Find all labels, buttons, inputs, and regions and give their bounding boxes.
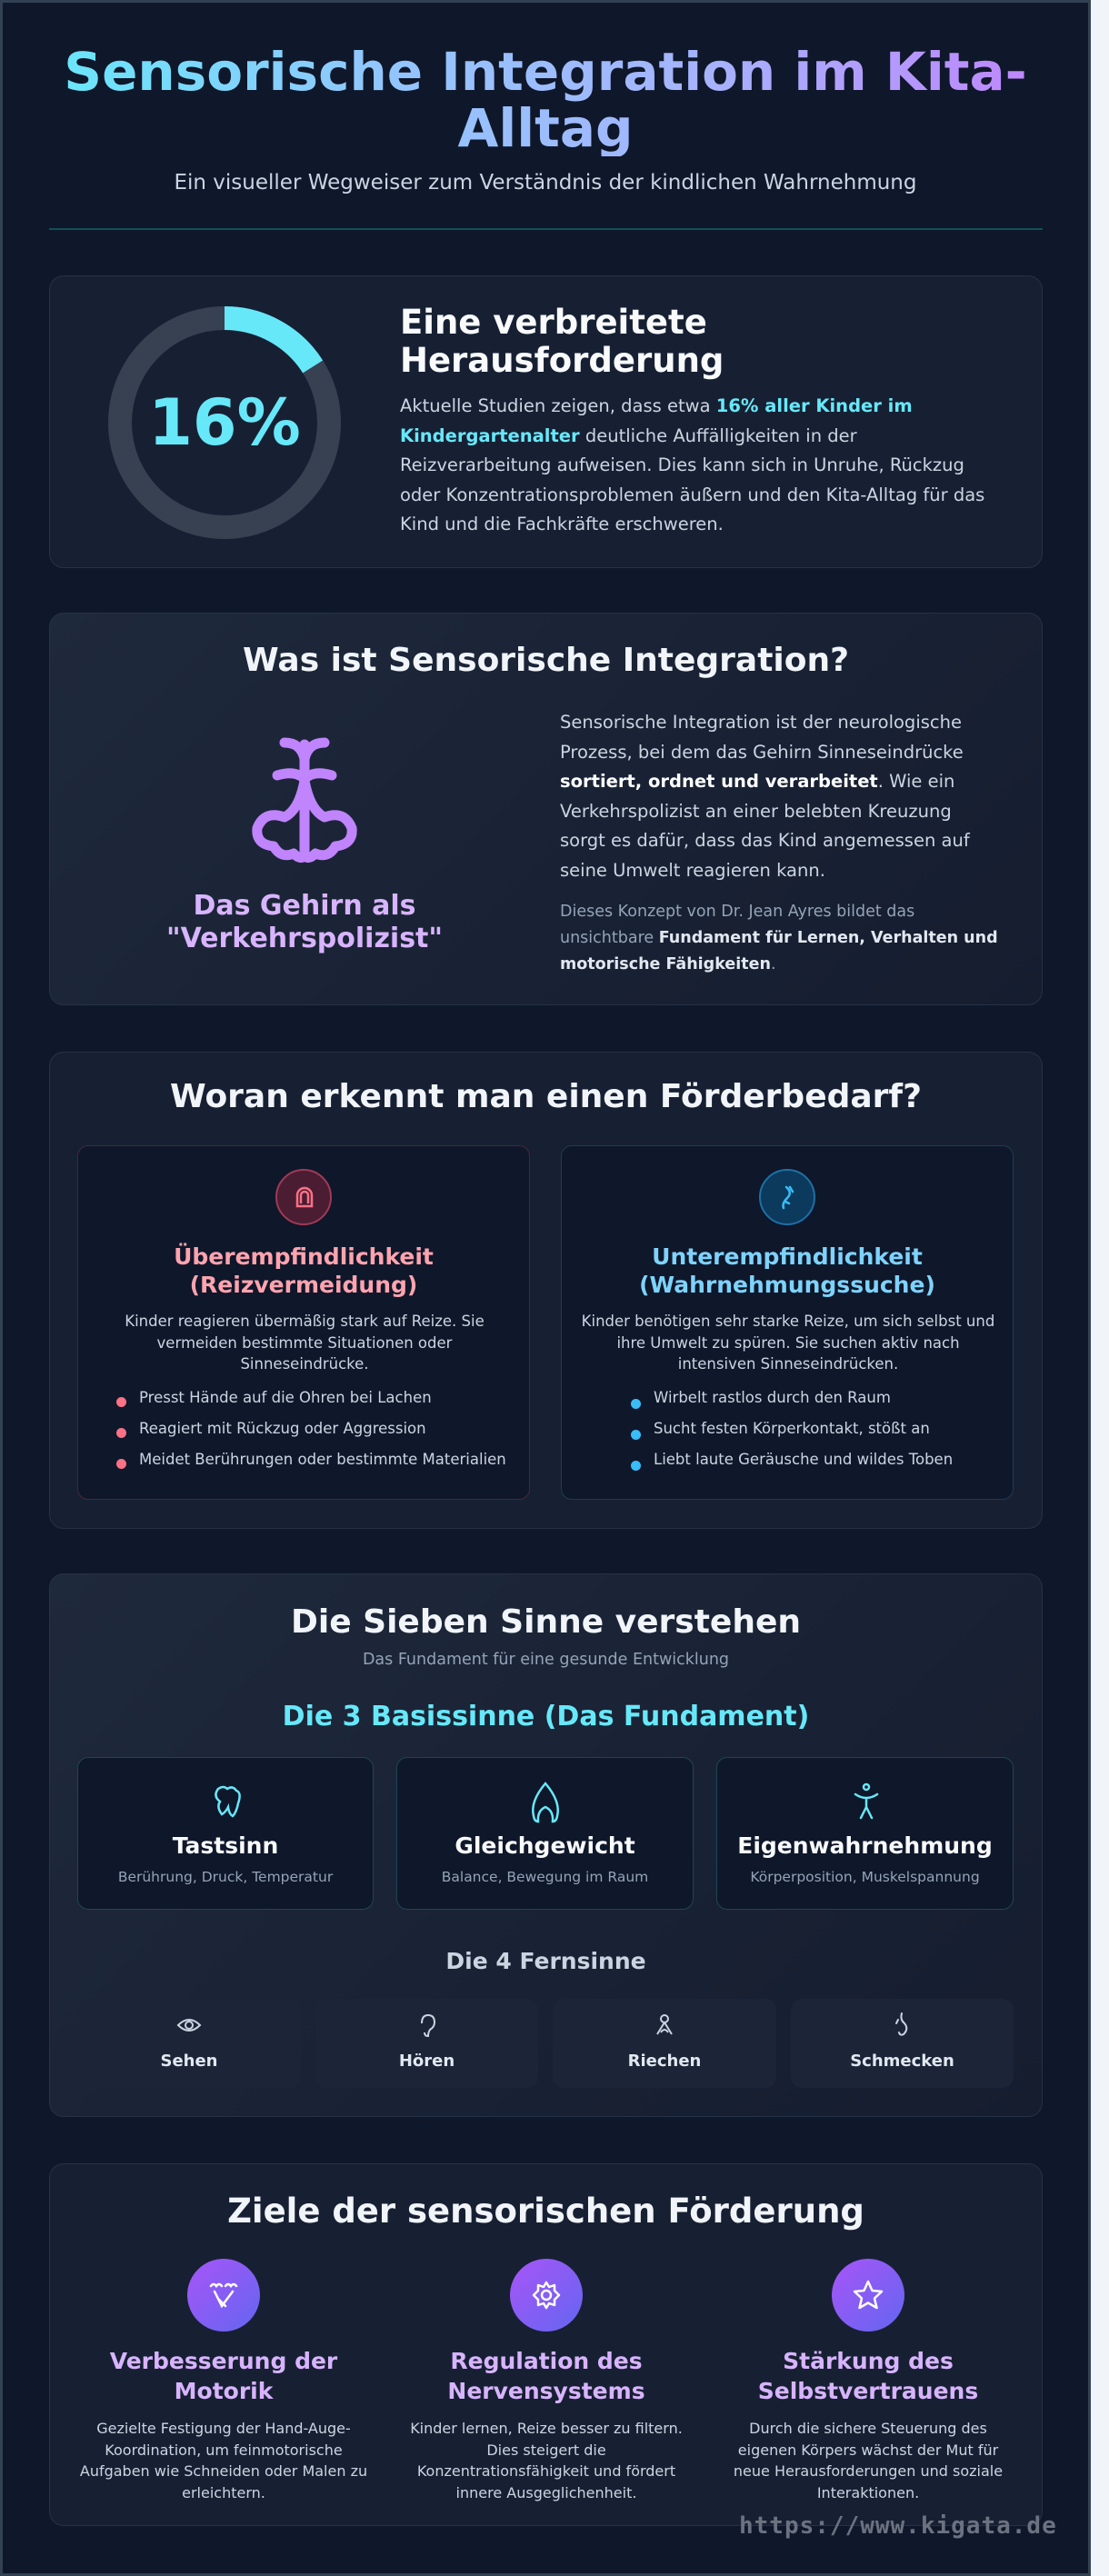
subheading: Das Fundament für eine gesunde Entwicklung [363,1651,729,1669]
goal: nervous system: Kinder lernen, Reize besser zu filtern. [410,2420,683,2437]
card: Sehen: Sehen [160,2052,218,2071]
bullet list: Reagiert mit Rückzug oder Aggression [139,1420,426,1437]
card title: (Wahrnehmungssuche) [639,1272,935,1298]
icon: eye [176,2019,202,2032]
donut chart 16%: 16% [148,385,301,460]
card: Riechen [553,1999,776,2088]
bullet list: Wirbelt rastlos durch den Raum [654,1389,891,1406]
caption: Das Gehirn als [193,890,416,922]
heading [400,303,724,380]
text block: Reizverarbeitung aufweisen. Dies kann sich in Unruhe, Rückzug oder Konzentrationsproblemen äußern und den Kita-Alltag für das Kind und die Fachkräfte erschweren. [400,454,984,534]
card text: Kinder benötigen sehr starke Reize, um sich selbst und ihre Umwelt zu spüren. Sie suchen aktiv nach intensiven Sinneseindrücken. [582,1313,994,1373]
goal: motor skills: Gezielte Festigung der Hand-Auge-Koordination, um feinmotorische Aufgaben wie Schneiden oder Malen zu erleichtern. [80,2420,367,2501]
goal: motor skills: Motorik [175,2378,273,2404]
goal: nervous system: Dies steigert die [486,2441,606,2458]
card title: Unterempfindlichkeit [652,1243,923,1270]
goal: motor skills: Verbesserung der [110,2348,337,2374]
goal: self confidence: Stärkung des [783,2348,954,2374]
title: Sensorische Integration im Kita- [64,41,1027,103]
text block [400,395,984,534]
card: over-sensitivity [77,1145,530,1500]
panel: seven senses [49,1573,1043,2117]
panel: signs [49,1052,1043,1529]
bullet list [116,1389,506,1469]
heading: Herausforderung [400,341,724,380]
card: Gleichgewicht: Balance, Bewegung im Raum [442,1869,648,1885]
goal: self confidence: Selbstvertrauens [758,2378,978,2404]
icon: hand [215,1785,241,1818]
heading: Eine verbreitete [400,303,707,342]
icon: flame [532,1782,559,1823]
card text: Kinder reagieren übermäßig stark auf Reize. Sie vermeiden bestimmte Situationen oder Sinneseindrücke. [125,1313,485,1373]
heading: Woran erkennt man einen Förderbedarf? [170,1078,922,1115]
section title: basic senses: Die 3 Basissinne (Das Fundament) [283,1701,809,1732]
card: Tastsinn: Berührung, Druck, Temperatur [118,1869,333,1885]
card title [174,1243,434,1298]
icon: star [832,2259,904,2331]
card: Sehen [77,1999,301,2088]
goal: motor skills [80,2259,367,2501]
text block: Aktuelle Studien zeigen, dass etwa 16% aller Kinder im Kindergartenalter deutliche Auffälligkeiten in der [400,395,913,445]
title: Alltag [457,97,634,159]
bullet list: Liebt laute Geräusche und wildes Toben [654,1451,953,1468]
card: Hören [315,1999,538,2088]
bullet list: Sucht festen Körperkontakt, stößt an [654,1420,930,1437]
icon: hands [187,2259,260,2331]
card: under-sensitivity [561,1145,1014,1500]
goal: self confidence [734,2259,1003,2501]
donut chart 16% [108,306,341,539]
card: Tastsinn: Tastsinn [173,1832,278,1859]
card title: (Reizvermeidung) [190,1272,417,1298]
icon: person [854,1783,878,1820]
heading: Was ist Sensorische Integration? [243,642,849,679]
goal: nervous system: Konzentrationsfähigkeit und fördert [417,2462,675,2480]
card: Schmecken [791,1999,1014,2088]
watermark: https://www.kigata.de [739,2512,1057,2540]
subtitle: Ein visueller Wegweiser zum Verständnis der kindlichen Wahrnehmung [175,171,916,195]
bullet list: Meidet Berührungen oder bestimmte Materialien [139,1451,506,1468]
card title [639,1243,935,1298]
goal: nervous system: Regulation des [450,2348,643,2374]
goal: nervous system: innere Ausgeglichenheit. [456,2483,636,2501]
heading: Die Sieben Sinne verstehen [291,1603,801,1641]
icon: tongue [895,2012,907,2036]
section title: distance senses: Die 4 Fernsinne [445,1948,646,1974]
icon: ear protection [275,1169,332,1225]
panel: statistic [49,275,1043,568]
bullet list [631,1389,953,1471]
goal: nervous system: Nervensystems [447,2378,645,2404]
icon: nose [656,2014,673,2034]
card: Schmecken: Schmecken [850,2052,954,2071]
card: Riechen: Riechen [628,2052,701,2071]
icon: movement [759,1169,815,1225]
icon: brain / traffic [252,738,357,864]
icon: gear [510,2259,583,2331]
card: Hören: Hören [399,2052,455,2071]
card title: Überempfindlichkeit [174,1243,434,1270]
card: Tastsinn [77,1757,374,1910]
card: Eigenwahrnehmung: Eigenwahrnehmung [737,1832,993,1859]
card: Eigenwahrnehmung: Körperposition, Muskelspannung [750,1869,980,1885]
panel: what is sensory integration [49,613,1043,1005]
text block: Sensorische Integration ist der neurologische Prozess, bei dem das Gehirn Sinneseindrücke sortiert, ordnet und verarbeitet. Wie ein Verkehrspolizist an einer belebten Kreuzung sorgt es dafür, dass das Kind angemessen auf seine Umwelt reagieren kann. [560,712,970,880]
card: Eigenwahrnehmung [716,1757,1014,1910]
icon: ear [421,2014,435,2037]
caption: "Verkehrspolizist" [166,923,443,954]
note: Dieses Konzept von Dr. Jean Ayres bildet das unsichtbare Fundament für Lernen, Verhalten und motorische Fähigkeiten. [560,903,998,973]
card: Gleichgewicht [396,1757,694,1910]
bullet list: Presst Hände auf die Ohren bei Lachen [139,1389,432,1406]
goal: nervous system [410,2259,683,2501]
goal: self confidence: Durch die sichere Steuerung des eigenen Körpers wächst der Mut für neue Herausforderungen und soziale Interaktionen. [734,2420,1003,2501]
card: Gleichgewicht: Gleichgewicht [455,1832,635,1859]
caption [166,890,443,954]
heading: Ziele der sensorischen Förderung [227,2192,864,2231]
title [36,44,1054,156]
panel: goals [49,2163,1043,2526]
